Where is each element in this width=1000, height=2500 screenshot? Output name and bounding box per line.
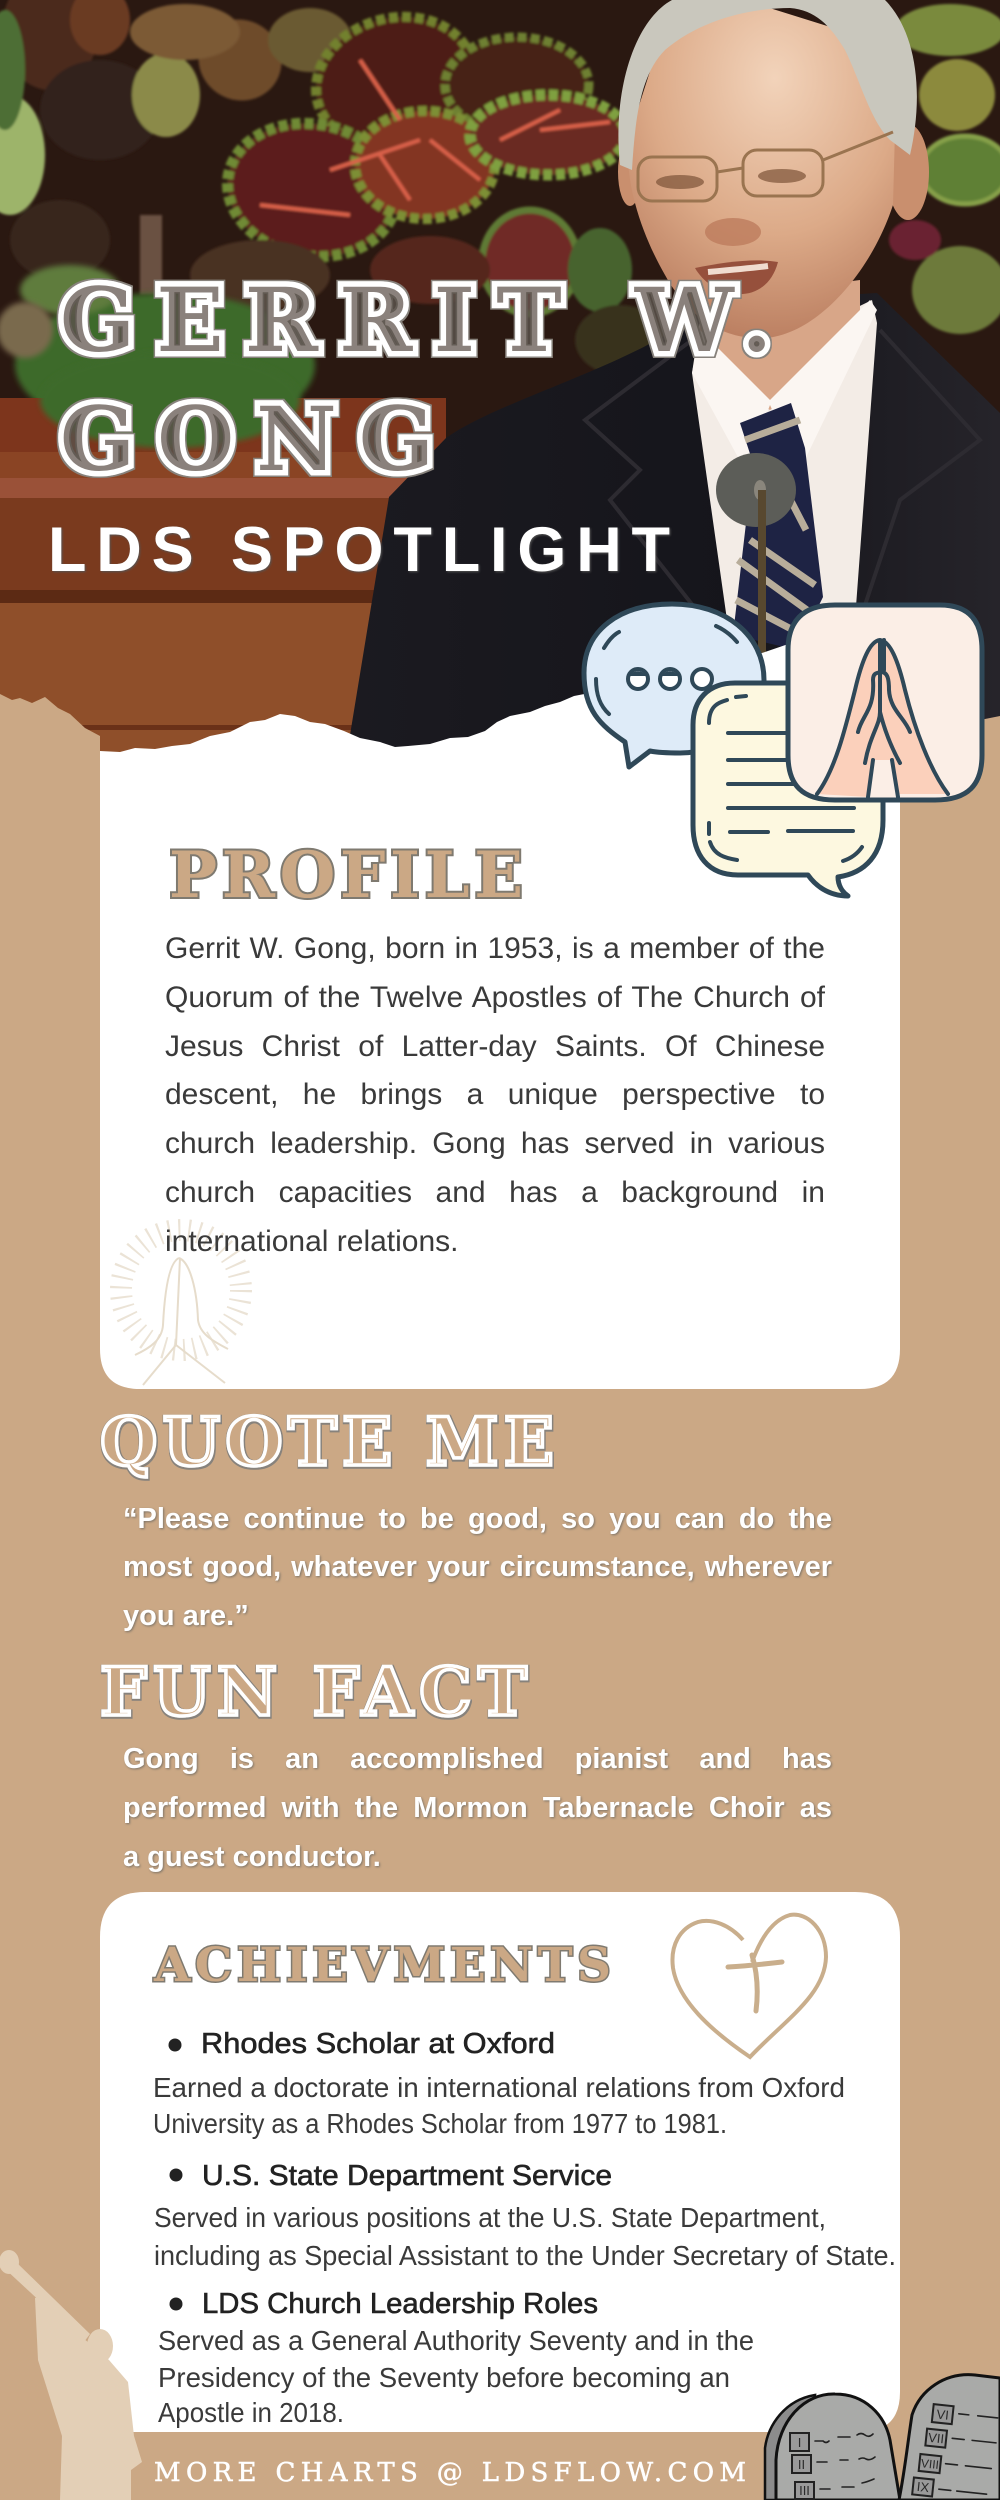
icon: trumpeting angel silhouette <box>0 2250 142 2500</box>
man: suit <box>350 293 1000 780</box>
text block: fun fact: Gong is an accomplished pianist and has <box>123 1743 832 1775</box>
subtitle: LDS SPOTLIGHT <box>48 515 670 585</box>
icon: praying hands tile <box>788 605 982 800</box>
achievement: State Department <box>154 2160 896 2271</box>
man: hair <box>618 0 917 170</box>
achievement: Rhodes Scholar: Earned a doctorate in international relations from Oxford <box>153 2072 845 2103</box>
footer link text: MORE CHARTS @ LDSFLOW.COM <box>154 2458 746 2488</box>
text block: profile: international relations. <box>165 1225 459 1258</box>
left tablet <box>765 2394 900 2500</box>
man: face <box>628 5 895 338</box>
foliage background <box>0 0 1000 375</box>
achievement: Church Leadership: LDS Church Leadership Roles <box>202 2288 598 2320</box>
right tablet: VI <box>936 2407 950 2423</box>
heading: quote me: QUOTE ME <box>100 1403 554 1481</box>
achievement: Rhodes Scholar: University as a Rhodes Scholar from 1977 to 1981. <box>153 2108 727 2139</box>
torn paper background <box>0 694 1000 2500</box>
text block: profile: Quorum of the Twelve Apostles of The Church of <box>165 981 825 1014</box>
icon: blue speech bubble <box>584 604 764 767</box>
man: glasses <box>638 132 893 201</box>
achievement: Rhodes Scholar: Rhodes Scholar at Oxford <box>201 2028 555 2060</box>
achievement: Church Leadership: Presidency of the Seventy before becoming an <box>158 2362 730 2393</box>
text block: quote: you are.” <box>123 1600 249 1632</box>
photo: speaker in front of foliage <box>0 0 1000 780</box>
text block: quote <box>123 1503 834 1634</box>
heading: achievements: ACHIEVMENTS <box>153 1938 611 1993</box>
text block: quote: most good, whatever your circumstance, wherever <box>123 1551 832 1583</box>
heading: fun fact: FUN FACT <box>100 1653 527 1731</box>
microphone <box>716 453 796 660</box>
heading: profile: PROFILE <box>169 838 523 913</box>
icon: heart with cross <box>672 1915 826 2057</box>
achievement: Church Leadership: Apostle in 2018. <box>158 2397 344 2428</box>
panel: achievements white card <box>100 1892 900 2432</box>
man: shirt and neck <box>692 300 877 620</box>
text block: fun fact: a guest conductor. <box>123 1841 381 1873</box>
right tablet: VII <box>927 2430 945 2446</box>
right tablet: IX <box>916 2479 930 2495</box>
leaf veins <box>260 60 610 215</box>
title: name: GONG <box>60 387 434 491</box>
achievement: Rhodes Scholar <box>153 2028 845 2139</box>
text block: profile: descent, he brings a unique perspective to <box>165 1078 825 1111</box>
achievement: State Department: including as Special Assistant to the Under Secretary of State. <box>154 2240 896 2271</box>
text block: quote: “Please continue to be good, so you can do the <box>123 1503 832 1535</box>
man: tie <box>733 403 823 650</box>
text block: fun fact <box>123 1743 833 1874</box>
text block: profile: church leadership. Gong has served in various <box>165 1127 825 1160</box>
achievement: Church Leadership <box>158 2288 754 2428</box>
left tablet: II <box>798 2457 805 2472</box>
podium <box>0 398 446 452</box>
title: name: GERRIT W. <box>60 268 772 372</box>
text block: fun fact: performed with the Mormon Tabernacle Choir as <box>123 1792 832 1824</box>
panel: profile white card with torn top <box>100 640 900 1389</box>
text block: profile: Gerrit W. Gong, born in 1953, is a member of the <box>165 932 825 965</box>
icon: yellow speech bubble <box>693 683 883 896</box>
man: ears <box>893 126 929 220</box>
text block: profile <box>165 932 825 1258</box>
achievement: State Department: Served in various positions at the U.S. State Department, <box>154 2202 826 2233</box>
achievement: Church Leadership: Served as a General Authority Seventy and in the <box>158 2325 754 2356</box>
right tablet <box>899 2375 1000 2500</box>
icon: faint praying hands with rays <box>121 1230 241 1385</box>
achievement: State Department: U.S. State Department Service <box>202 2160 612 2192</box>
text block: profile: Jesus Christ of Latter-day Saints. Of Chinese <box>165 1030 825 1063</box>
icon: stone tablets with numerals <box>765 2375 1000 2500</box>
fern <box>12 290 318 398</box>
right tablet: VIII <box>920 2456 940 2472</box>
title: name <box>60 268 772 491</box>
left tablet: I <box>798 2435 801 2450</box>
text block: profile: church capacities and has a background in <box>165 1176 825 1209</box>
left tablet: III <box>799 2483 810 2498</box>
